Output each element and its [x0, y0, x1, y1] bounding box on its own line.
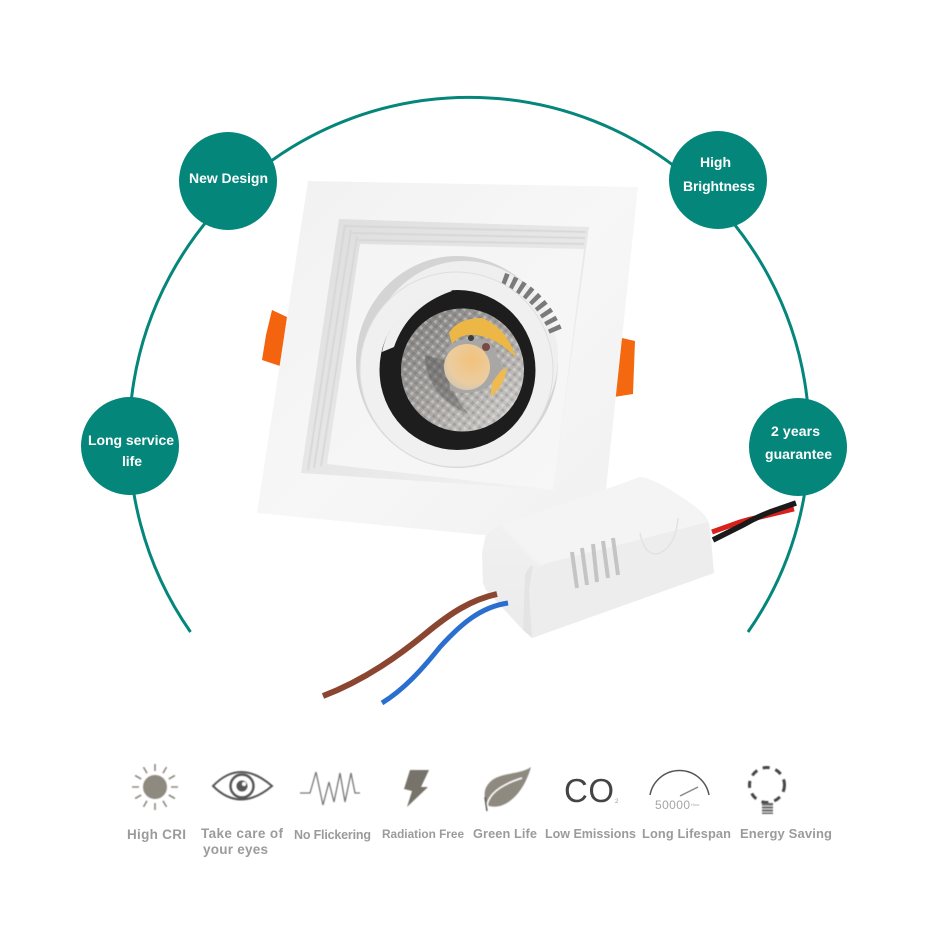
- yellow arc lower: [491, 368, 507, 397]
- icon: lifespan gauge: [650, 770, 709, 812]
- badge: 2 years guarantee: guarantee: [765, 446, 832, 462]
- LED driver box: [482, 475, 714, 638]
- badge: High Brightness: High: [700, 154, 731, 170]
- COB mount: [447, 338, 503, 393]
- icon: CO2: 2: [615, 799, 619, 805]
- recess ridges: [308, 225, 586, 470]
- red and black wires: [712, 503, 796, 540]
- label: Take care of your eyes: your eyes: [203, 842, 268, 857]
- badge: Long service life: [81, 397, 179, 495]
- orange clip left: [262, 310, 287, 366]
- driver body: [482, 477, 714, 638]
- recess inner face: [327, 244, 584, 490]
- teal feature arc: [129, 97, 809, 632]
- label: Low Emissions: Low Emissions: [545, 827, 636, 841]
- driver round mark: [640, 518, 678, 554]
- icon row: [132, 764, 784, 814]
- label: Take care of your eyes: Take care of: [201, 826, 284, 841]
- label: High CRI: High CRI: [127, 827, 186, 842]
- yellow arc upper: [449, 318, 516, 358]
- fixture outer frame: [257, 181, 638, 546]
- icon: lifespan gauge: Hour: [691, 802, 700, 807]
- driver top shade: [500, 475, 712, 566]
- driver vents: [572, 538, 618, 588]
- icon: lifespan gauge: 50000: [655, 798, 690, 812]
- driver front face: [529, 522, 714, 638]
- blue wire: [382, 603, 508, 703]
- heatsink fins: [370, 261, 558, 455]
- downlight fixture: [257, 181, 638, 546]
- badge: New Design: [179, 132, 277, 230]
- heatsink housing: [356, 256, 558, 468]
- badge: High Brightness: [669, 131, 767, 229]
- icon: eye: [213, 772, 272, 800]
- badge: 2 years guarantee: 2 years: [771, 423, 820, 439]
- badge: High Brightness: Brightness: [683, 178, 755, 194]
- badge: Long service life: Long service: [88, 432, 174, 448]
- brown wire: [323, 594, 497, 696]
- black bezel: [380, 290, 536, 450]
- mount screws: [468, 335, 490, 351]
- label: Take care of your eyes: [201, 826, 284, 857]
- white front ring: [360, 272, 553, 467]
- icon: energy saving bulb: [750, 768, 784, 814]
- label: No Flickering: No Flickering: [294, 828, 371, 842]
- label: Energy Saving: Energy Saving: [740, 826, 832, 841]
- label: Green Life: Green Life: [473, 826, 537, 841]
- icon labels: [127, 826, 832, 857]
- recess walls: [301, 219, 589, 490]
- icon: sun: [132, 764, 178, 810]
- COB emitter: [444, 344, 490, 390]
- label: Radiation Free: Radiation Free: [382, 827, 464, 841]
- icon: CO2: CO: [564, 772, 614, 809]
- badge: Long service life: life: [122, 453, 142, 469]
- bezel highlight: [382, 288, 452, 352]
- driver side slot: [523, 566, 533, 638]
- icon: leaf: [485, 767, 531, 811]
- badge: New Design: New Design: [189, 170, 268, 186]
- label: Long Lifespan: Long Lifespan: [642, 826, 731, 841]
- dark shadow band: [425, 355, 470, 415]
- orange clip right: [614, 338, 635, 397]
- badge: 2 years guarantee: [749, 398, 847, 496]
- reflector: [401, 308, 524, 432]
- icon: flicker wave: [300, 772, 360, 805]
- icon: lightning bolt: [404, 770, 429, 807]
